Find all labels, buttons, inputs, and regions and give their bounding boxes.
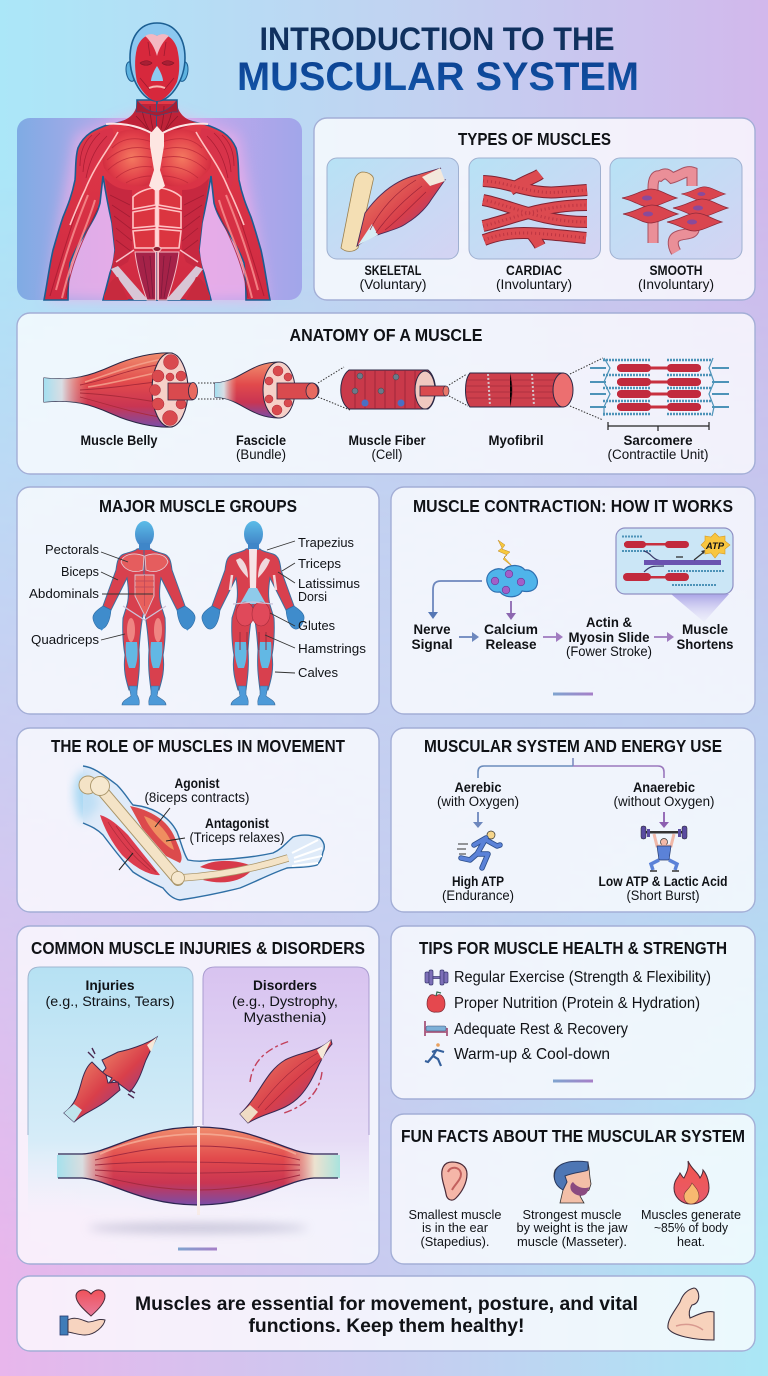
label: smooth: SMOOTH: [650, 263, 702, 278]
icon: runner: [457, 831, 500, 868]
bracket: aerobic vs anaerobic: [478, 758, 664, 778]
illustration: human muscular figure: [44, 23, 270, 300]
label: high ATP: High ATP: [452, 874, 504, 889]
label: aerobic: [437, 780, 519, 809]
card: smooth muscle: [610, 158, 742, 259]
heading: tips: TIPS FOR MUSCLE HEALTH & STRENGTH: [419, 938, 727, 958]
tip: warm-up: Warm-up & Cool-down: [454, 1046, 610, 1063]
labels: front: Quadriceps: [31, 632, 100, 647]
label: myofibril: Myofibril: [488, 433, 544, 448]
panel: major muscle groups: [17, 487, 379, 714]
illustration: arm: [74, 766, 324, 900]
label: antagonist: (Triceps relaxes): [190, 830, 284, 845]
label: sarcomere: (Contractile Unit): [608, 447, 708, 462]
arrow: anaerobic down: [659, 812, 669, 828]
label: smooth: [638, 263, 714, 292]
panel: energy use: [391, 728, 755, 912]
label: fascicle: [236, 433, 286, 462]
illustration: weakened muscle: [240, 1040, 332, 1123]
fact: flame: ~85% of body: [654, 1221, 729, 1235]
panel: injuries and disorders: [17, 926, 379, 1264]
sub-panel: disorders: (e.g., Dystrophy,: [232, 994, 338, 1009]
heading: energy use: MUSCULAR SYSTEM AND ENERGY USE: [424, 736, 722, 756]
labels: back: [265, 535, 367, 680]
connector: dotted lines: [198, 358, 603, 420]
fact: ear: (Stapedius).: [420, 1235, 490, 1249]
fact: flame: Muscles generate: [641, 1208, 741, 1222]
label: cardiac: [496, 263, 572, 292]
label: antagonist: Antagonist: [205, 816, 269, 831]
closing text: functions. Keep them healthy!: [248, 1315, 524, 1337]
arrow: aerobic down: [473, 812, 483, 828]
fact: jaw: [516, 1161, 628, 1249]
card: cardiac muscle: [469, 158, 600, 259]
labels: back: Glutes: [298, 618, 335, 633]
fact: flame: [641, 1161, 741, 1249]
label: actin and myosin: Myosin Slide: [568, 630, 650, 645]
arrow: calcium to actin: [543, 632, 563, 642]
label: nerve signal: Signal: [412, 637, 452, 652]
label: muscle fiber: [348, 433, 426, 462]
panel: hero figure background: [17, 118, 302, 300]
label: high ATP: (Endurance): [442, 888, 514, 903]
label: skeletal: (Voluntary): [360, 277, 426, 292]
fact: ear: Smallest muscle: [408, 1208, 502, 1222]
panel: muscle contraction: [391, 487, 755, 714]
inset: sliding filament with ATP: ATP: [705, 541, 725, 552]
labels: front: Abdominals: [29, 586, 100, 601]
labels: front: Pectorals: [45, 542, 99, 557]
label: low ATP: (Short Burst): [626, 888, 700, 903]
heading: anatomy: ANATOMY OF A MUSCLE: [290, 325, 482, 345]
heading: types of muscles: TYPES OF MUSCLES: [458, 129, 611, 149]
label: nerve signal: [412, 622, 452, 652]
labels: back: Calves: [298, 665, 338, 680]
labels: back: Dorsi: [298, 589, 327, 604]
label: calcium release: [484, 622, 538, 652]
panel: types of muscles: [314, 118, 755, 300]
label: muscle fiber: Muscle Fiber: [348, 433, 426, 448]
fact: flame: heat.: [677, 1235, 705, 1249]
illustration: muscle belly: [44, 353, 198, 427]
icon: lightning and cell: [487, 540, 537, 597]
label: agonist: (8iceps contracts): [144, 790, 250, 805]
icon: heart in hand: [60, 1290, 105, 1335]
figure: front view: [93, 521, 195, 705]
label: agonist: [144, 776, 250, 805]
tip: warm-up: [425, 1043, 610, 1066]
fact: ear: is in the ear: [422, 1221, 488, 1235]
illustration: large muscle: [57, 1127, 340, 1215]
title: INTRODUCTION TO THE: [260, 21, 614, 57]
label: antagonist: [190, 816, 284, 845]
label: agonist: Agonist: [174, 776, 220, 791]
label: actin and myosin: [566, 615, 652, 659]
labels: front: Biceps: [61, 564, 99, 579]
illustration: torn muscle: [64, 1037, 157, 1122]
labels: back: Hamstrings: [298, 641, 367, 656]
label: cardiac: (Involuntary): [496, 277, 572, 292]
illustration: muscle fiber: [341, 370, 449, 409]
sub-panel: disorders: Myasthenia): [244, 1010, 326, 1025]
labels: back: Latissimus: [298, 576, 360, 591]
closing text: Muscles are essential for movement, posture, and vital: [135, 1293, 638, 1315]
icon: flexed arm: [668, 1288, 714, 1340]
label: muscle shortens: Shortens: [676, 637, 734, 652]
label: aerobic: Aerebic: [454, 780, 502, 795]
inset: sliding filament with ATP: [616, 528, 733, 594]
icon: weightlifter: [641, 826, 687, 871]
fact: jaw: Strongest muscle: [522, 1208, 622, 1222]
panel: fun facts: [391, 1114, 755, 1264]
pointer: inset callout: [671, 594, 729, 622]
sub-panel: disorders: Disorders: [253, 978, 317, 993]
shadow under muscle: [88, 1224, 308, 1232]
illustration: myofibril: [466, 373, 573, 407]
labels: front: [29, 542, 153, 647]
illustration: sarcomere: [590, 358, 729, 431]
label: anaerobic: [614, 780, 714, 809]
label: muscle fiber: (Cell): [372, 447, 402, 462]
label: low ATP: Low ATP & Lactic Acid: [598, 874, 728, 889]
fact: jaw: by weight is the jaw: [516, 1221, 628, 1235]
arrow: cell to calcium: [506, 601, 516, 620]
tip: rest: Adequate Rest & Recovery: [454, 1021, 628, 1038]
panel: closing message: [17, 1276, 755, 1351]
label: muscle shortens: Muscle: [682, 622, 728, 637]
closing text: [135, 1293, 638, 1337]
sub-panel: injuries: [28, 967, 193, 1215]
labels: back: Trapezius: [298, 535, 354, 550]
label: muscle shortens: [676, 622, 734, 652]
arrow: actin to shortens: [654, 632, 674, 642]
fact: jaw: muscle (Masseter).: [517, 1235, 627, 1249]
label: muscle belly: Muscle Belly: [80, 433, 158, 448]
label: calcium release: Calcium: [484, 622, 538, 637]
heading: injuries and disorders: COMMON MUSCLE INJURIES & DISORDERS: [31, 938, 365, 958]
label: calcium release: Release: [486, 637, 537, 652]
fact: ear: [408, 1162, 502, 1249]
label: actin and myosin: Actin &: [586, 615, 632, 630]
label: sarcomere: Sarcomere: [624, 433, 693, 448]
sub-panel: injuries: Injuries: [86, 978, 134, 993]
label: nerve signal: Nerve: [414, 622, 451, 637]
label: fascicle: (Bundle): [236, 447, 286, 462]
heading: role of muscles: THE ROLE OF MUSCLES IN MOVEMENT: [51, 736, 345, 756]
label: smooth: (Involuntary): [638, 277, 714, 292]
tip: regular exercise: Regular Exercise (Strength & Flexibility): [454, 969, 711, 986]
heading: muscle contraction: MUSCLE CONTRACTION: HOW IT WORKS: [413, 496, 733, 516]
title: MUSCULAR SYSTEM: [237, 55, 639, 99]
label: fascicle: Fascicle: [236, 433, 286, 448]
label: anaerobic: (without Oxygen): [614, 794, 714, 809]
panel: anatomy of a muscle: [17, 313, 755, 474]
label: low ATP: [598, 874, 728, 903]
labels: back: Triceps: [298, 556, 342, 571]
panel: tips: [391, 926, 755, 1099]
sub-panel: disorders: [203, 967, 369, 1215]
heading: major muscle groups: MAJOR MUSCLE GROUPS: [99, 496, 297, 516]
label: actin and myosin: (Fower Stroke): [566, 644, 652, 659]
title: [237, 21, 639, 99]
label: cardiac: CARDIAC: [506, 263, 562, 278]
panel: role of muscles in movement: [17, 728, 379, 912]
label: sarcomere: [608, 433, 708, 462]
label: skeletal: [360, 263, 426, 292]
figure: back view: [202, 521, 304, 705]
label: high ATP: [442, 874, 514, 903]
sub-panel: injuries: (e.g., Strains, Tears): [46, 994, 174, 1009]
label: aerobic: (with Oxygen): [437, 794, 519, 809]
arrow: cell to nerve signal: [428, 581, 482, 619]
card: skeletal muscle: [327, 158, 458, 259]
illustration: fascicle: [215, 362, 319, 418]
tip: proper nutrition: Proper Nutrition (Protein & Hydration): [454, 995, 700, 1012]
label: anaerobic: Anaerebic: [633, 780, 695, 795]
arrow: nerve to calcium: [459, 632, 479, 642]
label: skeletal: SKELETAL: [364, 263, 422, 278]
